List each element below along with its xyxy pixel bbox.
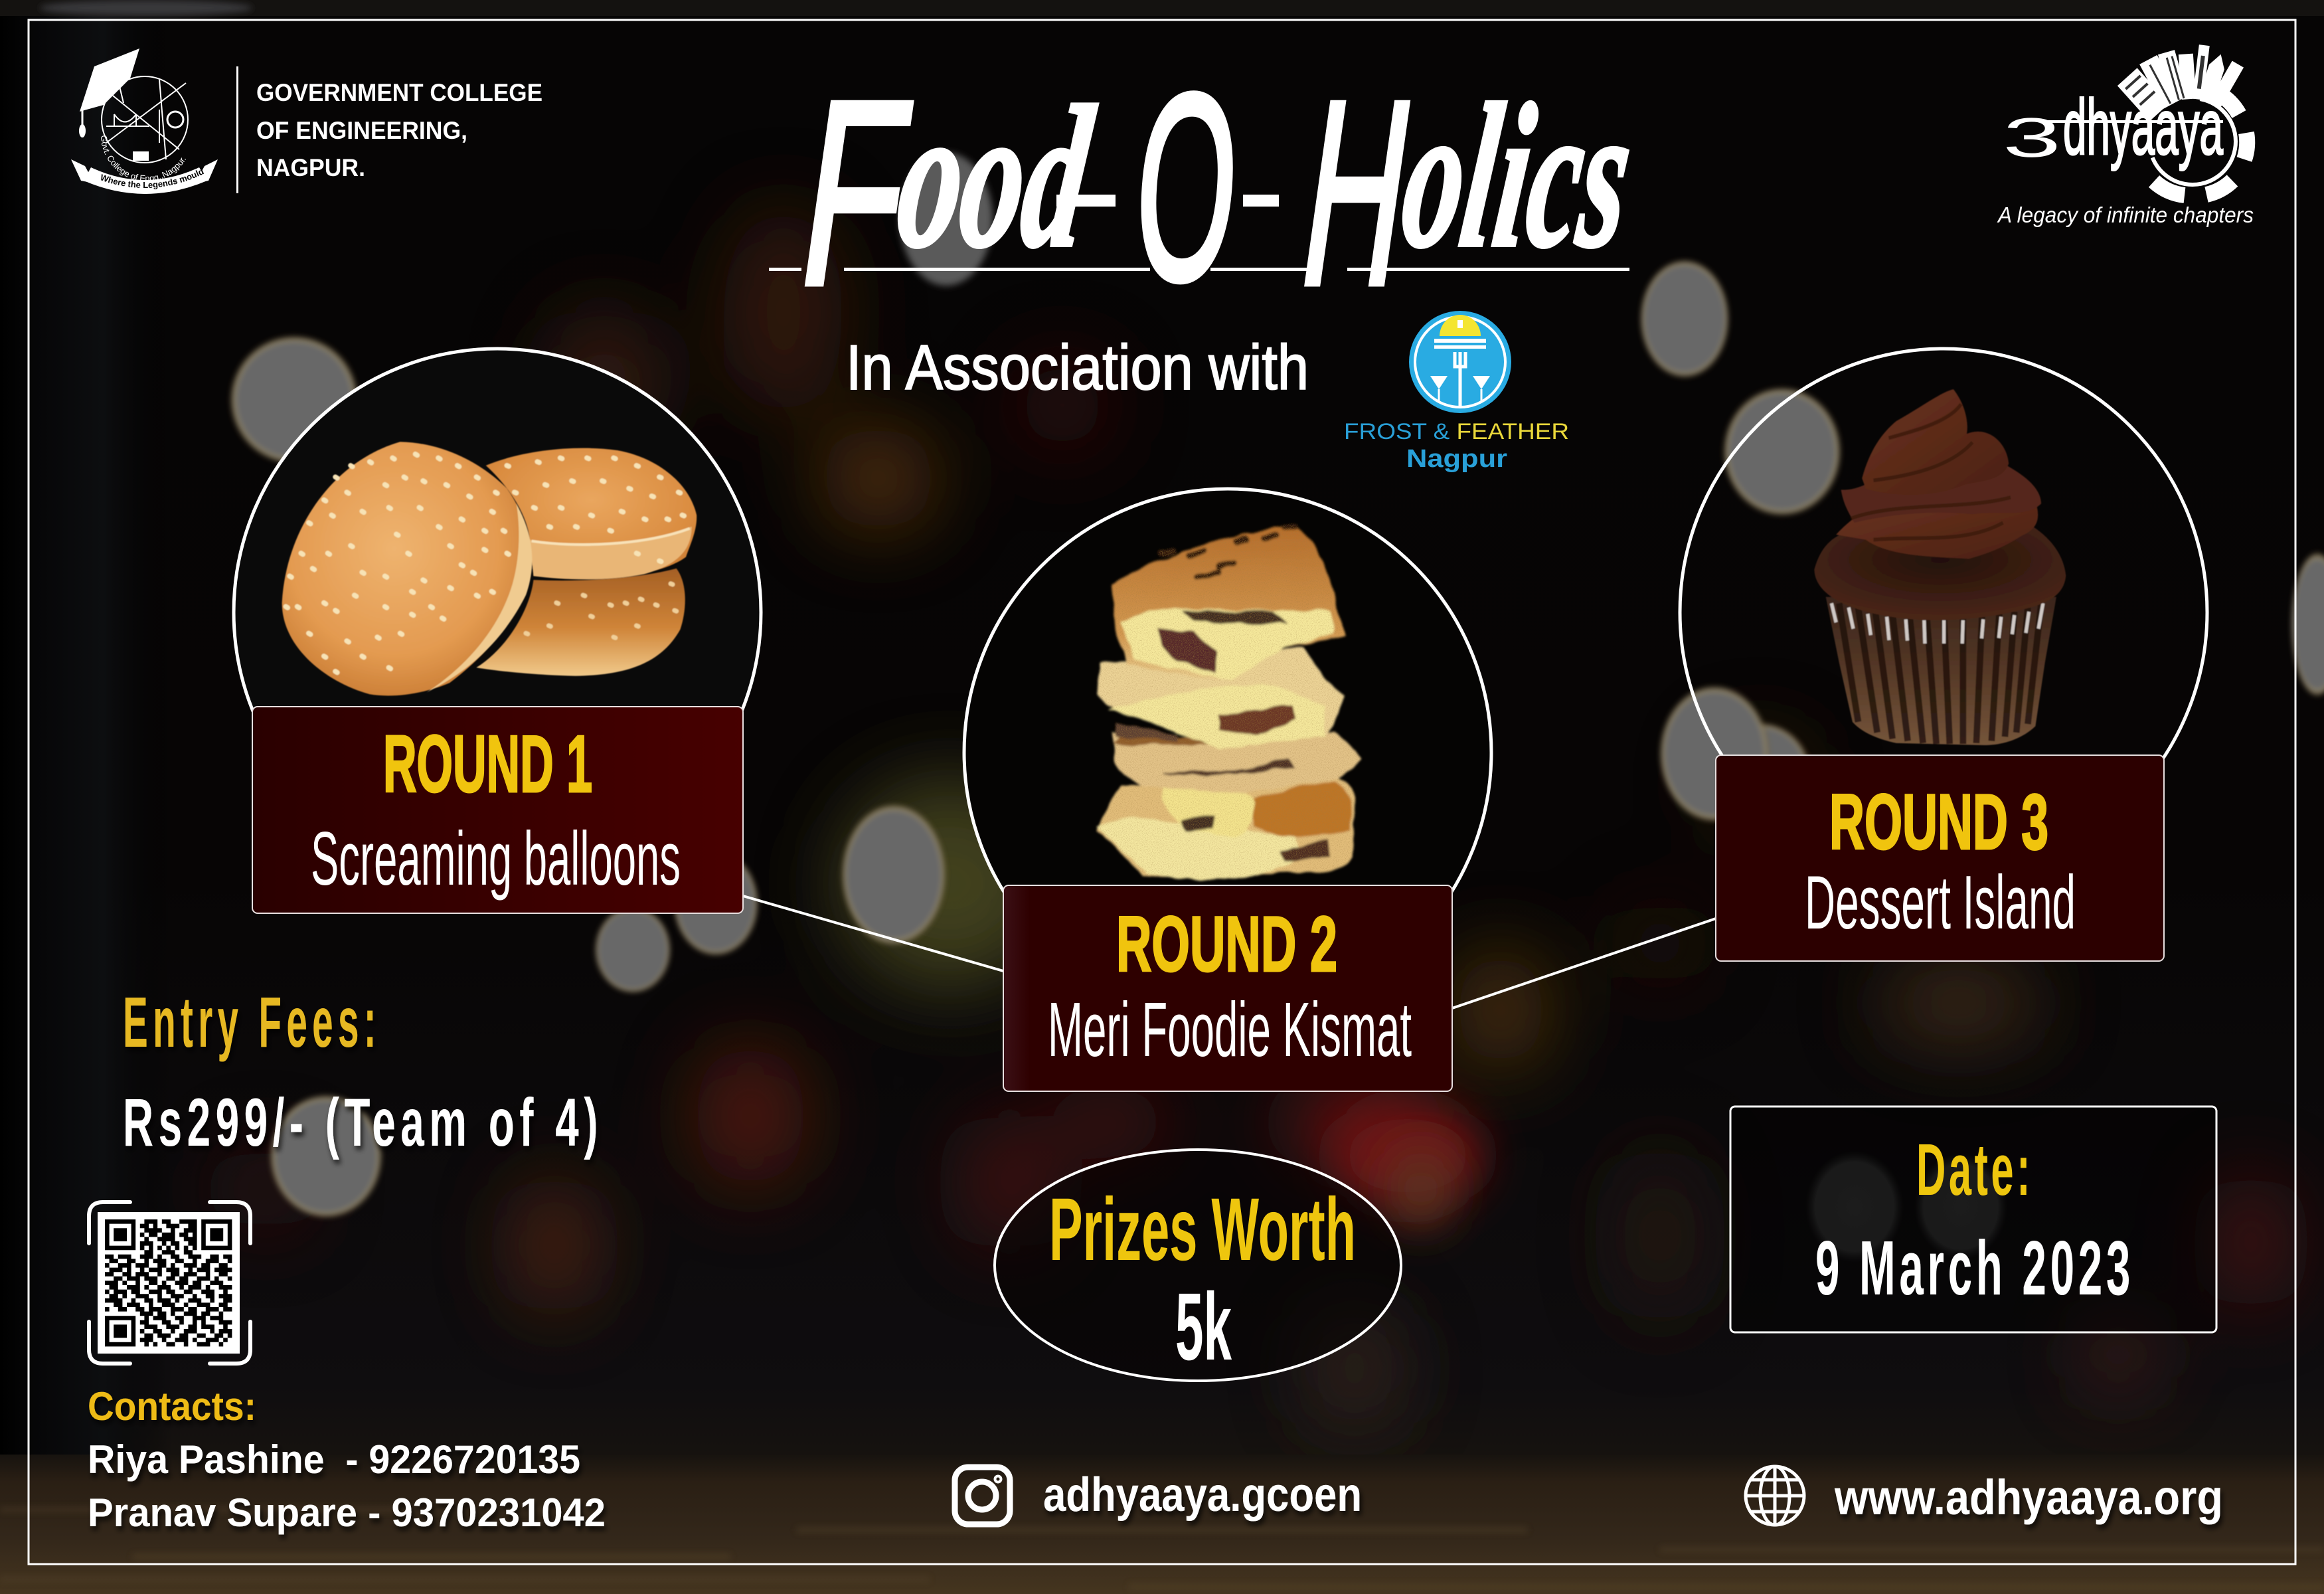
round 1 label box: Screaming balloons bbox=[311, 817, 681, 901]
round 3 label box: ROUND 3 bbox=[1829, 778, 2048, 866]
prize callout: Prizes Worth bbox=[1049, 1180, 1356, 1279]
title: Food-O-Holics: olics bbox=[1392, 62, 1643, 290]
website bbox=[1746, 1466, 2223, 1525]
icon: burger buns bbox=[282, 442, 697, 695]
association text: In Association with bbox=[846, 332, 1309, 403]
website: www.adhyaaya.org bbox=[1834, 1470, 2223, 1525]
entry fees bbox=[123, 982, 603, 1160]
round 1 ring bbox=[234, 349, 761, 876]
icon: chocolate cupcake bbox=[1814, 389, 2066, 745]
adhyaaya logo: 3 bbox=[2003, 106, 2061, 169]
panel: round 3 bbox=[1680, 349, 2207, 961]
college name bbox=[256, 79, 542, 181]
title: Food-O-Holics: F bbox=[786, 47, 926, 340]
entry fees: Rs299/- (Team of 4) bbox=[123, 1085, 603, 1160]
contacts: Contacts: bbox=[88, 1384, 256, 1429]
panel: round 2 bbox=[964, 489, 1491, 1091]
round 1 label box: ROUND 1 bbox=[383, 719, 592, 809]
round 3 label box bbox=[1716, 755, 2164, 961]
connector lines bbox=[743, 896, 1716, 1008]
round 2 label box: ROUND 2 bbox=[1116, 901, 1337, 988]
frost and feather logo: FROST & FEATHER bbox=[1344, 419, 1569, 444]
panel: round 1 bbox=[234, 349, 761, 913]
title: Food-O-Holics: H bbox=[1287, 47, 1428, 340]
college name: OF ENGINEERING, bbox=[256, 117, 467, 144]
prize callout: 5k bbox=[1175, 1273, 1232, 1380]
date box: Date: bbox=[1916, 1129, 2033, 1211]
college name: NAGPUR. bbox=[256, 154, 365, 181]
frost and feather logo bbox=[1344, 311, 1569, 473]
frost and feather logo: Nagpur bbox=[1406, 445, 1507, 473]
round 2 ring bbox=[964, 489, 1491, 1016]
icon: grilled cheese sandwich stack bbox=[1098, 524, 1362, 881]
date box bbox=[1730, 1107, 2216, 1332]
contacts bbox=[88, 1384, 606, 1535]
adhyaaya logo: A legacy of infinite chapters bbox=[1997, 203, 2254, 227]
round 3 label box: Dessert Island bbox=[1805, 861, 2076, 945]
contacts: Pranav Supare - 9370231042 bbox=[88, 1490, 606, 1535]
college name: GOVERNMENT COLLEGE bbox=[256, 79, 542, 106]
college logo: Govt. College of Engg.,Nagpur. bbox=[101, 135, 186, 180]
logo divider bbox=[236, 66, 238, 193]
entry fees: Entry Fees: bbox=[123, 982, 381, 1062]
college logo bbox=[71, 48, 218, 194]
icon: instagram bbox=[955, 1467, 1010, 1524]
instagram handle: adhyaaya.gcoen bbox=[1043, 1468, 1362, 1522]
contacts: Riya Pashine - 9226720135 bbox=[88, 1437, 580, 1482]
round 3 ring bbox=[1680, 349, 2207, 876]
title: Food-O-Holics: O bbox=[1127, 38, 1247, 335]
title: Food-O-Holics bbox=[769, 38, 1643, 340]
qr code bbox=[89, 1202, 250, 1364]
prize callout bbox=[995, 1150, 1401, 1381]
college logo: Where the Legends mould bbox=[101, 170, 205, 189]
instagram handle bbox=[955, 1467, 1362, 1524]
round 1 label box bbox=[252, 707, 743, 913]
icon: globe bbox=[1746, 1466, 1804, 1525]
round 2 label box bbox=[1003, 885, 1452, 1091]
round 2 label box: Meri Foodie Kismat bbox=[1048, 986, 1412, 1073]
title: Food-O-Holics: ood bbox=[888, 65, 1103, 290]
wood table edge bbox=[0, 1455, 2324, 1594]
adhyaaya logo bbox=[1997, 44, 2254, 227]
